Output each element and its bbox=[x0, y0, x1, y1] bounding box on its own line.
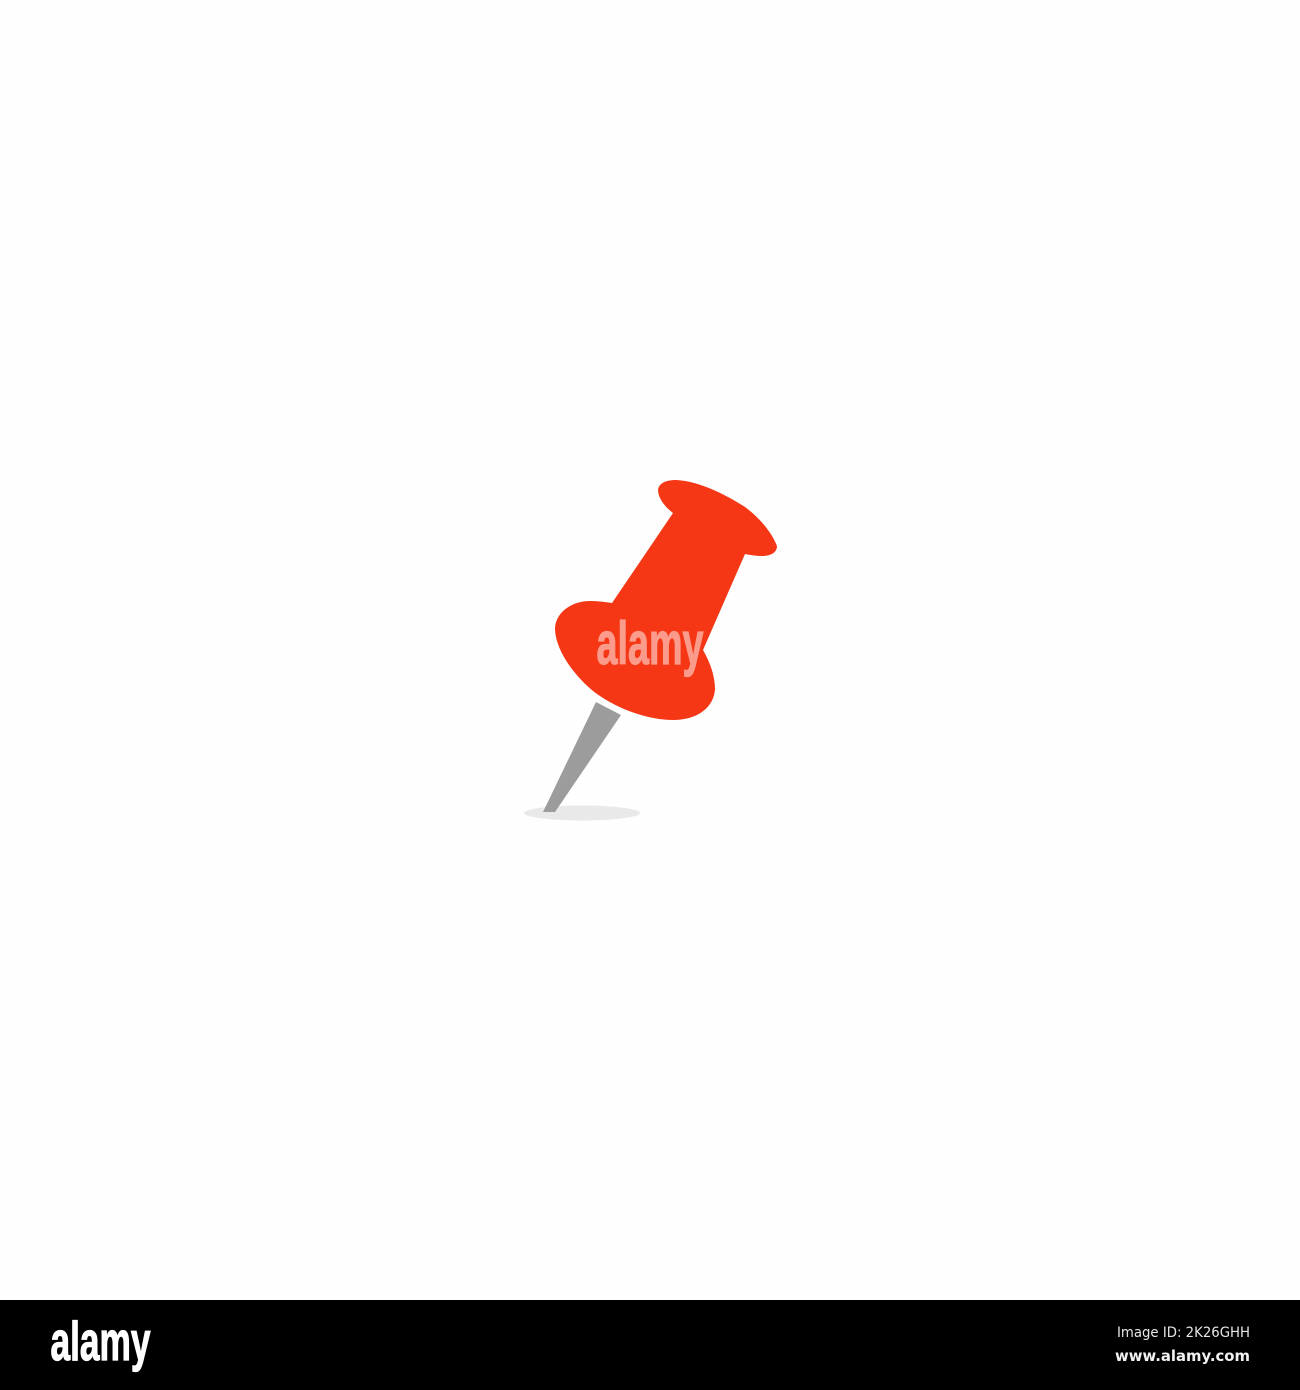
image ID: Image ID: 2K26GHH bbox=[1117, 1325, 1250, 1341]
watermark: alamy: alamy bbox=[596, 610, 704, 677]
footer bar bbox=[0, 1300, 1300, 1390]
pin head bbox=[555, 480, 777, 720]
website URL: www.alamy.com bbox=[1115, 1347, 1250, 1365]
pin needle bbox=[543, 702, 621, 812]
footer logo: alamy: alamy bbox=[50, 1310, 151, 1372]
icon: push pin bbox=[524, 480, 777, 820]
pin shadow bbox=[524, 806, 640, 820]
